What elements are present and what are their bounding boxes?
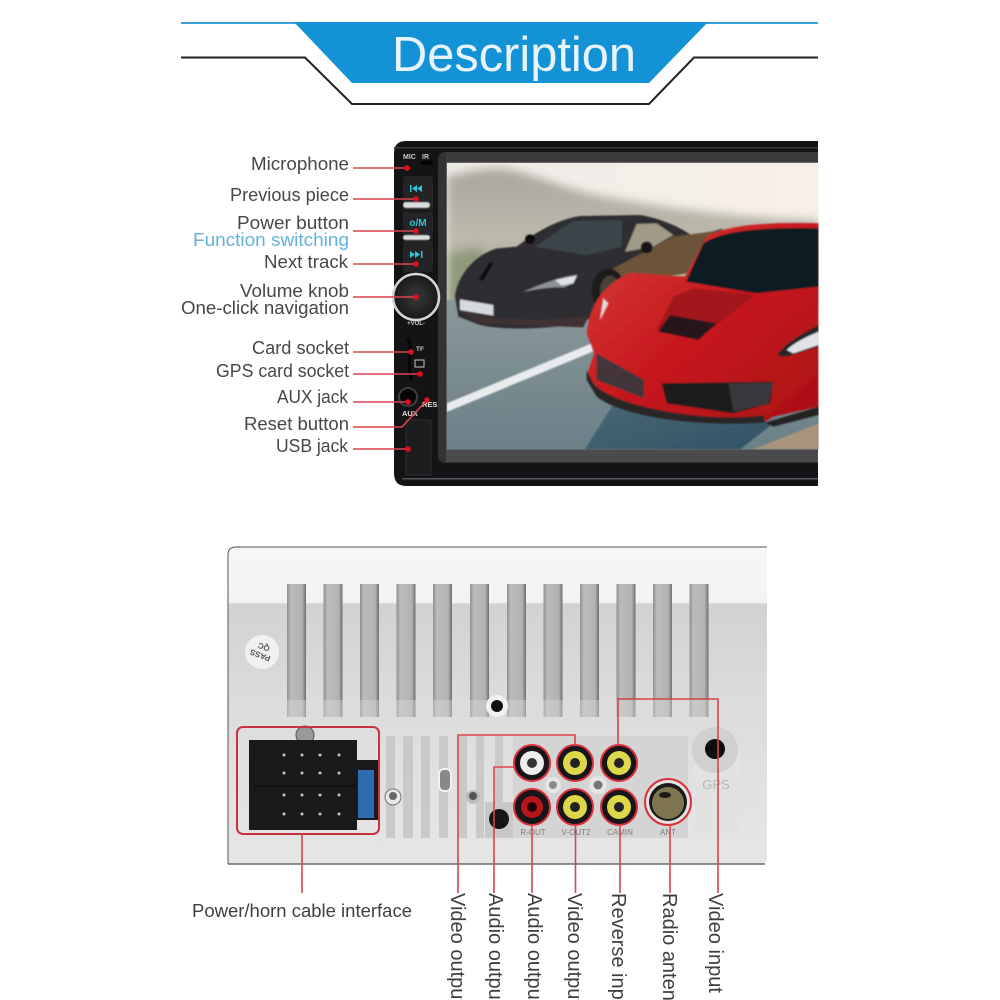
- button group with icons: o/M: [409, 218, 427, 229]
- recessed port plate: R-OUT: [520, 828, 546, 837]
- label: power button: Power button: [237, 213, 349, 233]
- label: USB jack: USB jack: [276, 436, 349, 456]
- GPS socket: [692, 727, 740, 838]
- QC pass sticker: [245, 635, 279, 669]
- USB door: [406, 420, 431, 475]
- label: microphone: [251, 154, 410, 174]
- label: GPS card socket: [216, 361, 423, 381]
- title banner: [181, 22, 818, 104]
- recessed port plate: CAMIN: [607, 828, 633, 837]
- RCA jack: video yellow: [557, 745, 593, 781]
- infographic: [181, 22, 819, 1000]
- label: power/horn cable interface: Power/horn cable interface: [192, 901, 412, 921]
- label: volume knob: One-click navigation: [181, 298, 349, 318]
- label: AUX jack: [277, 387, 411, 407]
- card sockets: [408, 338, 424, 380]
- AUX jack and reset: AUX: [402, 409, 418, 418]
- microphone and IR labels: IR: [422, 154, 429, 161]
- panel: rear of head unit: [228, 547, 767, 864]
- callout labels: rear: [192, 699, 726, 1000]
- GPS socket: GPS: [702, 777, 730, 792]
- label: video input: [618, 699, 726, 993]
- panel: front of head unit: [393, 141, 819, 486]
- antenna socket: [645, 779, 691, 825]
- recessed port plate: [485, 736, 688, 838]
- mounting screws: [296, 726, 480, 805]
- label: GPS card socket: GPS card socket: [216, 361, 349, 381]
- RCA jack: camera in: [601, 789, 637, 825]
- QC pass sticker: PASS: [248, 647, 272, 663]
- label: video input: Video input: [704, 893, 726, 993]
- label: next track: Next track: [264, 252, 349, 272]
- card sockets: TF: [416, 346, 424, 353]
- microphone and IR labels: MIC: [403, 154, 416, 161]
- label: audio output 1: [484, 767, 514, 1000]
- recessed port plate: ANT: [660, 828, 676, 837]
- label: card socket: [252, 338, 414, 358]
- volume knob: +VOL-: [407, 321, 425, 327]
- label: previous piece: [230, 185, 419, 205]
- callout labels: front: [181, 154, 430, 456]
- volume knob: [393, 274, 439, 327]
- microphone and IR labels: [403, 154, 433, 166]
- label: volume knob: [181, 281, 419, 318]
- label: reset button: Reset button: [244, 414, 349, 434]
- label: card socket: Card socket: [252, 338, 349, 358]
- screen photo: two sports cars: [447, 163, 819, 449]
- screw hole: [486, 695, 508, 717]
- RCA jack: video yellow: [601, 745, 637, 781]
- heat-sink fins: [287, 584, 709, 717]
- label: power button: Function switching: [193, 230, 349, 250]
- control strip: [393, 154, 439, 475]
- RCA jack: audio red: [514, 789, 550, 825]
- power connector: [237, 727, 380, 834]
- recessed port plate: V-OUT2: [562, 828, 591, 837]
- label: power button: [193, 213, 419, 250]
- QC pass sticker: QC: [256, 640, 271, 653]
- AUX jack and reset: [399, 388, 437, 418]
- button group with icons: [403, 176, 433, 272]
- AUX jack and reset: RES: [422, 400, 437, 409]
- label: USB jack: [276, 436, 411, 456]
- label: video output 1: [446, 735, 575, 1000]
- label: volume knob: Volume knob: [240, 281, 349, 301]
- label: next track: [264, 252, 419, 272]
- RCA jack: video out 2: [557, 789, 593, 825]
- label: previous piece: Previous piece: [230, 185, 349, 205]
- RCA jack: audio white: [514, 745, 550, 781]
- heading: Description: [392, 28, 636, 82]
- label: reset button: [244, 397, 430, 434]
- label: AUX jack: AUX jack: [277, 387, 349, 407]
- label: microphone: Microphone: [251, 154, 349, 174]
- lower vent slots: [386, 736, 503, 838]
